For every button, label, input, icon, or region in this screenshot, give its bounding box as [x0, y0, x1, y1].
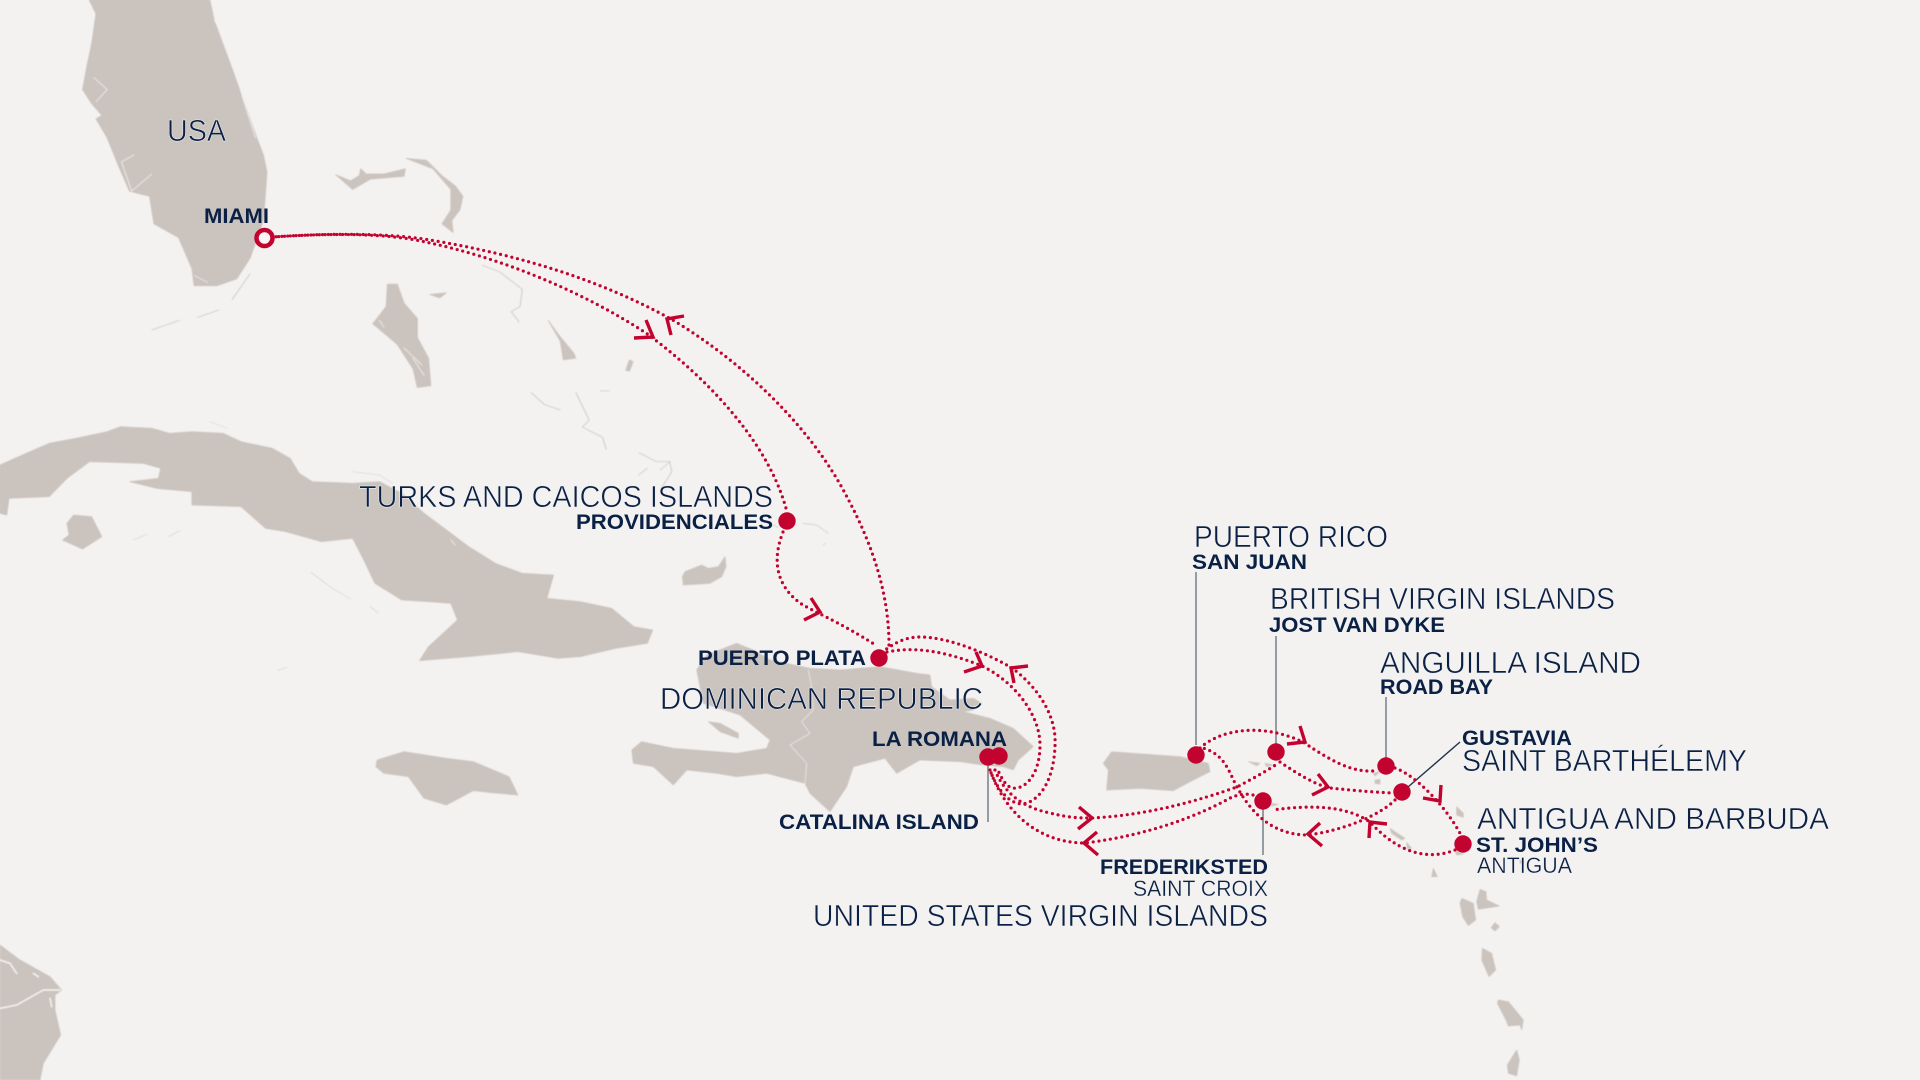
land: Bahamas	[336, 158, 672, 489]
land: Guadeloupe to Saint Lucia	[1432, 868, 1523, 1076]
marker: San Juan	[1187, 746, 1205, 764]
label: USA: USA	[167, 113, 226, 148]
land: Jamaica	[376, 752, 518, 805]
land: Yucatan	[0, 945, 62, 1080]
label: Anguilla Island: ANGUILLA ISLAND	[1380, 645, 1641, 680]
label: Turks and Caicos Islands: TURKS AND CAICOS ISLANDS	[359, 479, 773, 514]
label: Antigua and Barbuda: ANTIGUA AND BARBUDA	[1477, 801, 1829, 836]
label: Miami: MIAMI	[204, 204, 269, 228]
label: Providenciales: PROVIDENCIALES	[576, 510, 773, 534]
label: St. John's: ST. JOHN’S	[1476, 833, 1598, 857]
marker: Gustavia	[1393, 783, 1411, 801]
land: Cuba	[0, 422, 653, 805]
marker: Road Bay	[1377, 757, 1395, 775]
land: Hispaniola	[632, 643, 1033, 812]
map labels	[167, 113, 1829, 933]
marker: Jost Van Dyke	[1267, 743, 1285, 761]
label: Jost Van Dyke: JOST VAN DYKE	[1269, 613, 1445, 637]
land masses	[0, 0, 1524, 1080]
label: Antigua: ANTIGUA	[1477, 853, 1572, 878]
leader lines	[988, 572, 1460, 855]
marker: Providenciales	[778, 512, 796, 530]
label: United States Virgin Islands: UNITED STATES VIRGIN ISLANDS	[813, 898, 1268, 933]
label: Road Bay: ROAD BAY	[1380, 675, 1493, 699]
land: Florida	[83, 0, 267, 330]
label: Saint Barthelemy: SAINT BARTHÉLEMY	[1462, 743, 1747, 778]
marker: St. John's	[1454, 835, 1472, 853]
label: British Virgin Islands: BRITISH VIRGIN ISLANDS	[1270, 581, 1615, 616]
label: Dominican Republic: DOMINICAN REPUBLIC	[660, 681, 983, 716]
label: San Juan: SAN JUAN	[1192, 550, 1307, 574]
direction arrows	[634, 316, 1441, 855]
label: Gustavia: GUSTAVIA	[1462, 726, 1572, 750]
label: Puerto Plata: PUERTO PLATA	[698, 646, 866, 670]
land: Puerto Rico and Lesser Antilles	[1103, 752, 1524, 863]
label: Catalina Island: CATALINA ISLAND	[779, 810, 979, 834]
label: Puerto Rico: PUERTO RICO	[1194, 519, 1388, 554]
port markers	[256, 230, 1472, 853]
marker: La Romana	[990, 747, 1008, 765]
label: La Romana: LA ROMANA	[872, 727, 1007, 751]
marker: Frederiksted	[1254, 792, 1272, 810]
dotted routes	[273, 234, 1461, 855]
land: Inagua and Turks	[660, 462, 828, 585]
label: Saint Croix: SAINT CROIX	[1133, 876, 1268, 901]
marker: Miami	[256, 230, 272, 246]
marker: Catalina Island	[979, 748, 997, 766]
marker: Puerto Plata	[870, 649, 888, 667]
label: Frederiksted: FREDERIKSTED	[1100, 855, 1268, 879]
